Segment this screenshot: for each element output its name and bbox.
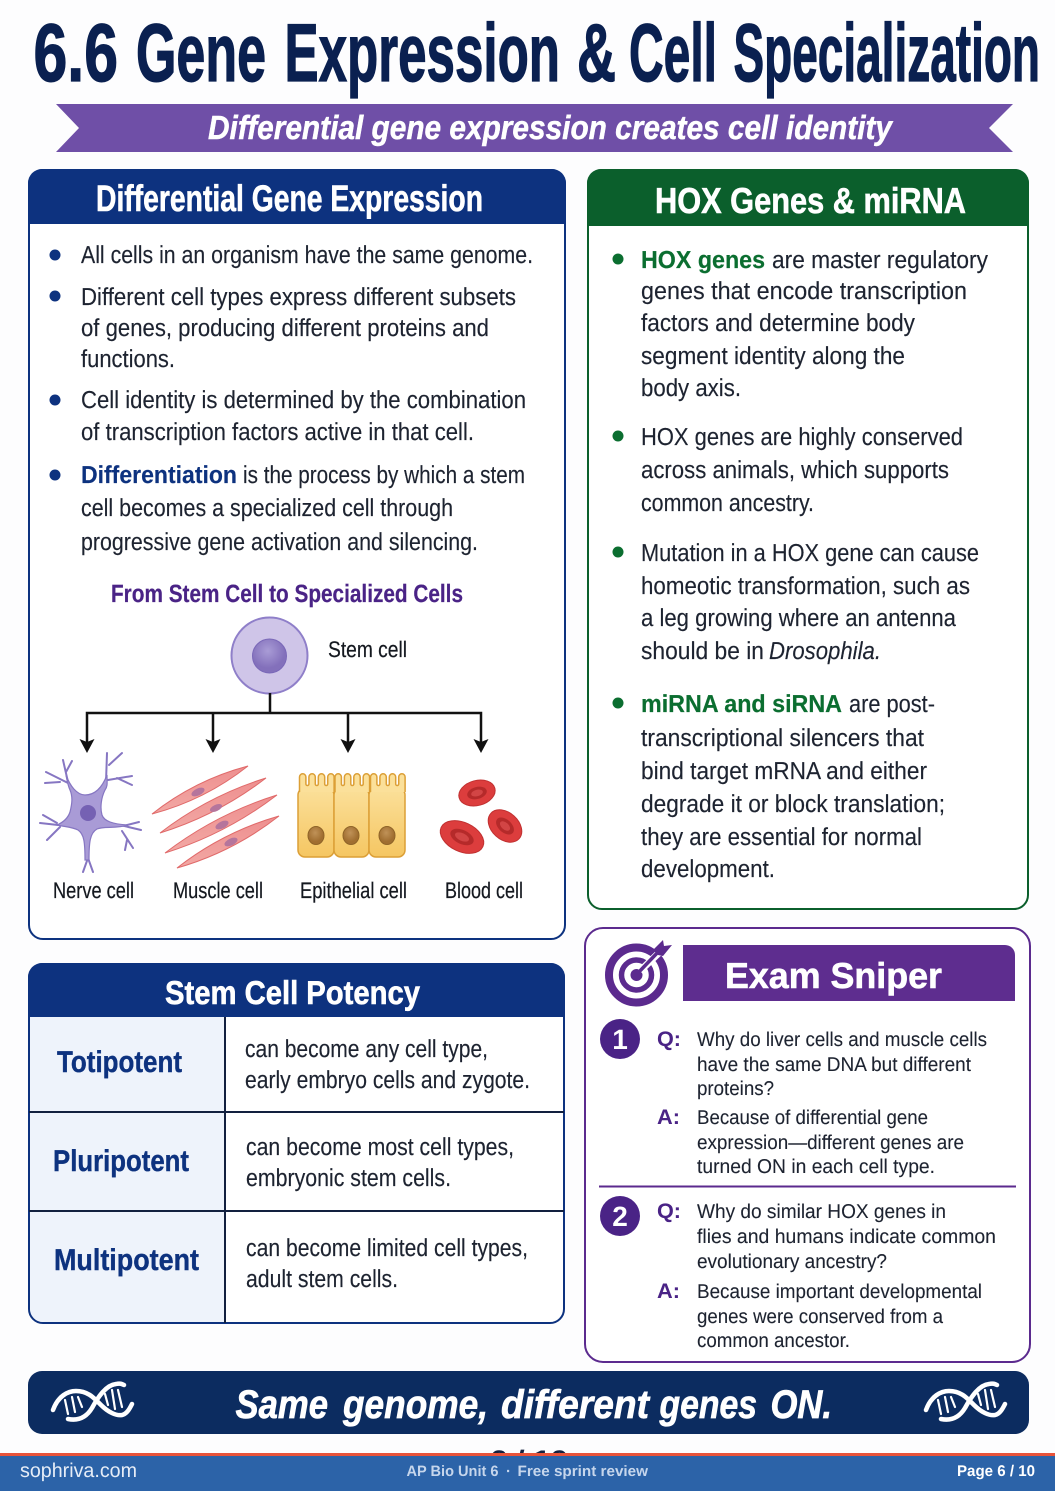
icon: dna right [926, 1384, 1005, 1420]
row: pluripotent [53, 1134, 514, 1192]
bullet list: genes that encode transcription [641, 278, 967, 305]
question 1: have the same DNA but different [697, 1054, 971, 1076]
row: multipotent [54, 1235, 528, 1293]
question 2: common ancestor. [697, 1330, 850, 1352]
row: pluripotent: embryonic stem cells. [246, 1165, 451, 1192]
title: Cell [629, 8, 717, 99]
bullet list: Mutation in a HOX gene can cause [641, 540, 979, 567]
bullet list [50, 242, 533, 556]
panel: stem cell potency table [28, 963, 565, 1323]
bullet list: All cells in an organism have the same genome. [81, 242, 533, 269]
cell type labels: Muscle cell [173, 878, 263, 903]
bullet list: bind target mRNA and either [641, 758, 927, 785]
bullet list: common ancestry. [641, 490, 814, 517]
stem cell label: Stem cell [328, 637, 407, 662]
bullet list: Drosophila. [769, 638, 881, 665]
bullet list: a leg growing where an antenna [641, 605, 956, 632]
bullet list: across animals, which supports [641, 457, 949, 484]
bullet list: of transcription factors active in that cell. [81, 419, 474, 446]
bullet list: Cell identity is determined by the combination [81, 387, 526, 414]
bullet list: are master regulatory [772, 247, 989, 274]
row: totipotent: can become any cell type, [245, 1036, 488, 1063]
question 2: flies and humans indicate common [697, 1226, 996, 1248]
bullet list: HOX genes [641, 247, 765, 274]
question 2: A: [657, 1280, 680, 1303]
question 2: Why do similar HOX genes in [697, 1201, 946, 1223]
footer course text: Free sprint review [518, 1463, 648, 1480]
panel: differential gene expression [28, 169, 566, 939]
row: pluripotent: can become most cell types, [246, 1134, 514, 1161]
bullet list: Differentiation [81, 462, 237, 489]
question 2: Because important developmental [697, 1281, 982, 1303]
row: multipotent: can become limited cell types, [246, 1235, 528, 1262]
question 1 [600, 1019, 987, 1178]
banner text: genes [659, 1383, 757, 1427]
cell type labels: Blood cell [445, 878, 523, 903]
question 2: 2 [612, 1201, 628, 1232]
bullet list: factors and determine body [641, 310, 916, 337]
bullet list: HOX genes are highly conserved [641, 424, 963, 451]
takeaway banner [28, 1371, 1029, 1434]
bullet list: development. [641, 856, 775, 883]
row: pluripotent: Pluripotent [53, 1145, 189, 1178]
row: totipotent: Totipotent [57, 1046, 182, 1079]
bullet list: is the process by which a stem [243, 462, 525, 489]
panel heading: Differential Gene Expression [96, 178, 483, 219]
subtitle ribbon [56, 104, 1013, 152]
bullet list: degrade it or block translation; [641, 791, 945, 818]
banner text [236, 1383, 832, 1427]
icon: stem cell [232, 618, 308, 694]
diagram: stem cell to specialized cells [40, 580, 528, 903]
footer site name: sophriva.com [20, 1460, 137, 1482]
bullet list: of genes, producing different proteins and [81, 315, 489, 342]
icon: blood cells [435, 776, 528, 860]
bullet list: should be in [641, 638, 764, 665]
question 2: genes were conserved from a [697, 1306, 944, 1328]
row: multipotent: adult stem cells. [246, 1266, 398, 1293]
question 1: Because of differential gene [697, 1107, 928, 1129]
title: Expression [284, 8, 560, 99]
bullet list: segment identity along the [641, 343, 905, 370]
banner text: genome, [342, 1383, 488, 1427]
cell type labels [53, 878, 523, 903]
icon: epithelial cells [298, 774, 405, 857]
cell type labels: Nerve cell [53, 878, 134, 903]
bullet list: cell becomes a specialized cell through [81, 495, 453, 522]
exam sniper heading [683, 945, 1015, 1001]
footer course text: · [506, 1463, 511, 1480]
banner text: ON. [770, 1383, 832, 1427]
question 1: expression—different genes are [697, 1132, 964, 1154]
row: totipotent: early embryo cells and zygote. [245, 1067, 530, 1094]
bullet list: transcriptional silencers that [641, 725, 924, 752]
panel heading [28, 169, 566, 224]
bullet list: homeotic transformation, such as [641, 573, 970, 600]
bullet list [612, 247, 989, 883]
icon: nerve cell [40, 753, 141, 872]
footer course text [406, 1463, 648, 1480]
cell type labels: Epithelial cell [300, 878, 407, 903]
panel heading [587, 169, 1029, 226]
panel: hox genes and mirna [587, 169, 1029, 909]
title: Gene [136, 8, 266, 99]
clipped page number behind footer: 6 / 10 [490, 1446, 568, 1473]
question 1: 1 [612, 1024, 628, 1055]
banner text: different [501, 1383, 651, 1427]
footer course text: AP Bio Unit 6 [406, 1463, 498, 1480]
footer bar [0, 1453, 1055, 1491]
panel heading: HOX Genes & miRNA [655, 180, 966, 221]
question 1: Q: [657, 1028, 681, 1051]
exam sniper heading: Exam Sniper [725, 955, 942, 996]
row: multipotent: Multipotent [54, 1244, 199, 1277]
bullet list: Different cell types express different subsets [81, 284, 516, 311]
bullet list: miRNA and siRNA [641, 691, 842, 718]
potency left column shading [30, 1017, 225, 1322]
bullet list: progressive gene activation and silencing. [81, 529, 478, 556]
bullet list: body axis. [641, 375, 741, 402]
icon: muscle cells [152, 766, 279, 868]
branching arrows [80, 693, 488, 753]
bullet list: functions. [81, 346, 175, 373]
subtitle ribbon: Differential gene expression creates cell identity [208, 110, 894, 147]
icon: dna left [53, 1384, 132, 1420]
banner text: Same [236, 1383, 328, 1427]
bullet list: are post- [849, 691, 935, 718]
table heading [28, 963, 565, 1017]
question 2: evolutionary ancestry? [697, 1251, 887, 1273]
title: 6.6 [34, 8, 118, 99]
footer page number: Page 6 / 10 [957, 1463, 1035, 1480]
question 1: Why do liver cells and muscle cells [697, 1029, 987, 1051]
question 1: proteins? [697, 1078, 774, 1100]
panel: exam sniper [585, 928, 1030, 1362]
question 1: A: [657, 1106, 680, 1129]
diagram title: From Stem Cell to Specialized Cells [111, 580, 463, 608]
table heading: Stem Cell Potency [165, 974, 421, 1011]
question 1: turned ON in each cell type. [697, 1156, 935, 1178]
bullet list: they are essential for normal [641, 824, 922, 851]
question 2: Q: [657, 1200, 681, 1223]
row: totipotent [57, 1036, 530, 1094]
title: & [577, 8, 616, 99]
title [34, 8, 1040, 99]
icon: target with arrow [609, 940, 672, 1002]
question 2 [600, 1196, 996, 1352]
